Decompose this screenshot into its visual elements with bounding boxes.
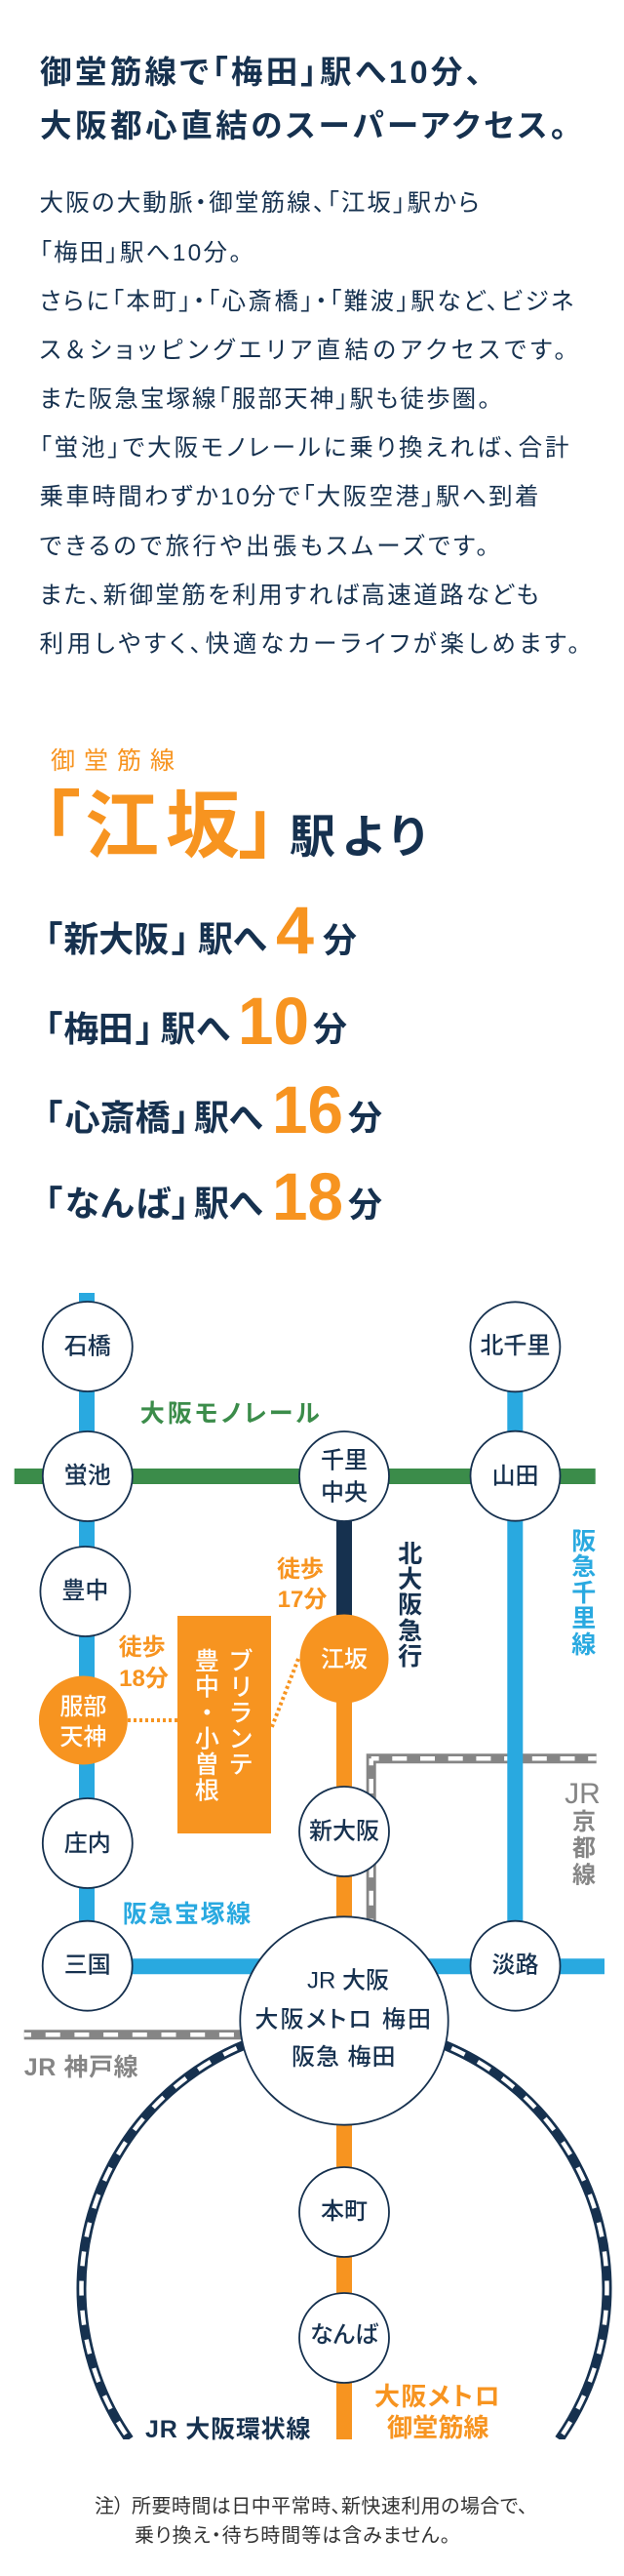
label: Hankyu Senri: 阪 xyxy=(571,1528,596,1555)
text block: introduction: 乗車時間わずか10分で「大阪空港」駅へ到着 xyxy=(39,483,538,510)
text block: introduction: さらに「本町」・「心斎橋」・「難波」駅など、ビジネ xyxy=(39,288,573,315)
property box: Brillante: 曽 xyxy=(195,1751,219,1779)
travel time: Umeda: 梅田 xyxy=(63,1009,134,1049)
station: Esaka xyxy=(300,1614,388,1704)
property box: Brillante: 豊 xyxy=(195,1648,219,1675)
walk label: 17 minutes xyxy=(277,1556,327,1613)
station: Hotarugaike: 蛍池 xyxy=(64,1463,111,1489)
text block: introduction: ス＆ショッピングエリア直結のアクセスです。 xyxy=(39,337,566,364)
label: Midosuji: 御堂筋線 xyxy=(387,2413,489,2442)
station: Toyonaka: 豊中 xyxy=(61,1578,108,1604)
travel time: Shinsaibashi: 」 xyxy=(172,1098,189,1138)
station: Senri-Chuo xyxy=(299,1431,389,1521)
title: 大阪都心直結のスーパーアクセス。 xyxy=(40,108,566,143)
travel time: Shin-Osaka xyxy=(45,893,357,968)
travel time: Umeda: 「 xyxy=(45,1009,62,1049)
travel time: Umeda: 駅へ xyxy=(161,1009,230,1049)
label: Hankyu Senri: 急 xyxy=(571,1553,596,1581)
property box: Brillante: ・ xyxy=(201,1700,214,1727)
line: JR Osaka Loop xyxy=(81,2026,606,2439)
line: JR Kyoto xyxy=(371,1758,597,1942)
station: Ishibashi: 石橋 xyxy=(64,1333,111,1360)
text block: introduction: できるので旅行や出張もスムーズです。 xyxy=(39,533,488,560)
station: Kita-Senri: 北千里 xyxy=(480,1333,550,1359)
travel time: Shinsaibashi: 駅へ xyxy=(194,1098,263,1138)
text block: introduction: また阪急宝塚線「服部天神」駅も徒歩圏。 xyxy=(39,385,489,413)
travel time: Shin-Osaka: 分 xyxy=(323,922,357,960)
travel time: Shin-Osaka: 4 xyxy=(276,893,314,968)
label: Kita-Osaka Kyuko: 行 xyxy=(398,1643,422,1670)
footnote: 所要時間は日中平常時、新快速利用の場合で、 xyxy=(132,2495,527,2517)
travel time: Shinsaibashi: 「 xyxy=(45,1098,62,1138)
station: Awaji xyxy=(470,1921,560,2011)
label: JR Kyoto: JR xyxy=(565,1778,601,1810)
travel time: Namba xyxy=(45,1159,382,1234)
station name: 」 xyxy=(239,785,276,868)
walk label: 17 minutes: 17分 xyxy=(278,1587,327,1613)
label: Midosuji xyxy=(374,2382,500,2442)
travel time: Shinsaibashi: 分 xyxy=(348,1100,382,1138)
text block: introduction xyxy=(39,189,579,658)
walk label: 17 minutes: 徒歩 xyxy=(277,1556,324,1583)
station: Yamada: 山田 xyxy=(491,1464,538,1489)
station: Toyonaka xyxy=(40,1547,130,1636)
property box: Brillante xyxy=(177,1616,271,1833)
station: Kita-Senri xyxy=(470,1302,560,1391)
station: Awaji: 淡路 xyxy=(491,1952,538,1979)
property box: Brillante: ン xyxy=(230,1725,252,1752)
title xyxy=(40,55,566,143)
station name xyxy=(43,785,276,868)
property box: Brillante: リ xyxy=(231,1674,251,1702)
text block: introduction: 利用しやすく、快適なカーライフが楽しめます。 xyxy=(39,630,579,658)
travel time: Namba: 分 xyxy=(348,1187,382,1225)
travel time: Shin-Osaka: 「 xyxy=(45,919,62,959)
text block: introduction: 「梅田」駅へ10分。 xyxy=(39,239,242,266)
station: Hattori-Tenjin xyxy=(39,1676,128,1764)
label: Hankyu Senri: 線 xyxy=(571,1631,596,1659)
line: Osaka Monorail xyxy=(15,1469,596,1484)
heading: from Esaka station xyxy=(43,747,426,868)
walk label: 18 minutes: 徒歩 xyxy=(119,1634,166,1661)
property box: Brillante: ラ xyxy=(230,1700,252,1727)
label: JR Osaka Loop: JR 大阪環状線 xyxy=(145,2416,310,2443)
station: Shin-Osaka: 新大阪 xyxy=(309,1819,379,1844)
label: Hankyu Senri xyxy=(571,1528,596,1659)
station: Shin-Osaka xyxy=(299,1787,389,1876)
property box: Brillante: ブ xyxy=(230,1648,254,1675)
station name: 江坂 xyxy=(85,785,240,868)
station: Senri-Chuo: 千里 xyxy=(321,1448,368,1473)
text block: introduction: 「蛍池」で大阪モノレールに乗り換えれば、合計 xyxy=(39,434,569,462)
label: JR Kyoto xyxy=(565,1778,601,1889)
text block: introduction: 大阪の大動脈・御堂筋線、「江坂」駅から xyxy=(39,189,480,217)
footnote: 注） xyxy=(95,2495,124,2517)
property box: Brillante: テ xyxy=(230,1751,252,1779)
walking route dots xyxy=(128,1659,298,1729)
label: Kita-Osaka Kyuko: 大 xyxy=(398,1566,422,1593)
label: Kita-Osaka Kyuko xyxy=(398,1541,422,1670)
text block: introduction: また、新御堂筋を利用すれば高速道路なども xyxy=(39,582,538,609)
travel time: Shin-Osaka: 」 xyxy=(172,919,189,959)
travel time: Shin-Osaka: 新大阪 xyxy=(63,919,169,959)
station: Ishibashi xyxy=(43,1302,133,1391)
label: JR Kyoto: 都 xyxy=(572,1835,596,1862)
property box: Brillante: 小 xyxy=(195,1725,219,1752)
station: Hotarugaike xyxy=(43,1431,133,1521)
title: 御堂筋線で「梅田」駅へ10分、 xyxy=(40,55,482,90)
suffix: 駅より xyxy=(290,811,426,863)
station: Umeda hub: 大阪メトロ 梅田 xyxy=(254,2006,431,2033)
label: Osaka Monorail: 大阪モノレール xyxy=(140,1400,320,1428)
property box: Brillante: 根 xyxy=(195,1778,219,1805)
station: Yamada xyxy=(470,1431,560,1521)
label: Kita-Osaka Kyuko: 北 xyxy=(398,1541,422,1568)
travel time: Namba: 」 xyxy=(172,1184,189,1224)
travel time: Namba: 「 xyxy=(45,1184,62,1224)
station: Umeda hub: JR 大阪 xyxy=(307,1967,389,1994)
travel time: Shinsaibashi: 16 xyxy=(272,1072,343,1147)
footnote xyxy=(95,2495,527,2547)
line: Kita-Osaka Kyuko xyxy=(336,1476,352,1659)
station: Umeda hub: 阪急 梅田 xyxy=(292,2044,396,2071)
station: Honmachi: 本町 xyxy=(321,2198,368,2225)
travel time: Shinsaibashi: 心斎橋 xyxy=(65,1098,171,1138)
label: Hankyu Senri: 里 xyxy=(571,1605,596,1632)
travel time: Shinsaibashi xyxy=(45,1072,382,1147)
label: Hankyu Takarazuka: 阪急宝塚線 xyxy=(123,1901,251,1928)
walk label: 18 minutes: 18分 xyxy=(119,1666,169,1692)
travel time: Namba: 18 xyxy=(272,1159,343,1234)
label: Kita-Osaka Kyuko: 急 xyxy=(398,1618,422,1645)
travel time: Namba: 駅へ xyxy=(194,1184,263,1224)
label: Hankyu Senri: 千 xyxy=(571,1580,596,1607)
station: Honmachi xyxy=(299,2167,389,2257)
property box: Brillante: 中 xyxy=(195,1674,219,1702)
travel time: Shin-Osaka: 駅へ xyxy=(198,919,267,959)
station: Namba xyxy=(299,2293,389,2383)
station: Esaka: 江坂 xyxy=(321,1647,368,1672)
label: JR Kyoto: 京 xyxy=(572,1809,596,1835)
travel time: Umeda: 分 xyxy=(313,1011,347,1049)
line: JR Kobe xyxy=(24,2030,244,2039)
travel time: Umeda xyxy=(45,984,347,1059)
label: Kita-Osaka Kyuko: 阪 xyxy=(398,1591,422,1619)
station: Shonai: 庄内 xyxy=(64,1831,111,1857)
station: Hattori-Tenjin: 服部 xyxy=(59,1694,106,1720)
station: Hattori-Tenjin: 天神 xyxy=(59,1724,106,1751)
label: JR Kyoto: 線 xyxy=(572,1862,596,1889)
station: Namba: なんば xyxy=(310,2322,379,2348)
line name: 御堂筋線 xyxy=(51,747,175,775)
line: Hankyu Takarazuka xyxy=(87,1293,604,1966)
footnote: 乗り換え・待ち時間等は含みません。 xyxy=(135,2524,450,2547)
station: Mikuni xyxy=(43,1921,133,2011)
travel time: Umeda: 10 xyxy=(238,984,309,1059)
walk label: 18 minutes xyxy=(119,1634,169,1692)
station name: 「 xyxy=(43,785,80,868)
line: Midosuji xyxy=(336,1659,352,2439)
travel time: Namba: なんば xyxy=(65,1184,172,1224)
station: Umeda hub xyxy=(240,1916,448,2125)
station: Shonai xyxy=(43,1798,133,1888)
label: JR Kobe: JR 神戸線 xyxy=(24,2054,138,2081)
station: Senri-Chuo: 中央 xyxy=(321,1479,368,1507)
station: Mikuni: 三国 xyxy=(64,1952,111,1979)
line: Hankyu Senri xyxy=(507,1347,523,1966)
label: Midosuji: 大阪メトロ xyxy=(374,2382,500,2411)
route map xyxy=(15,1293,606,2443)
travel time: Umeda: 」 xyxy=(136,1009,153,1049)
